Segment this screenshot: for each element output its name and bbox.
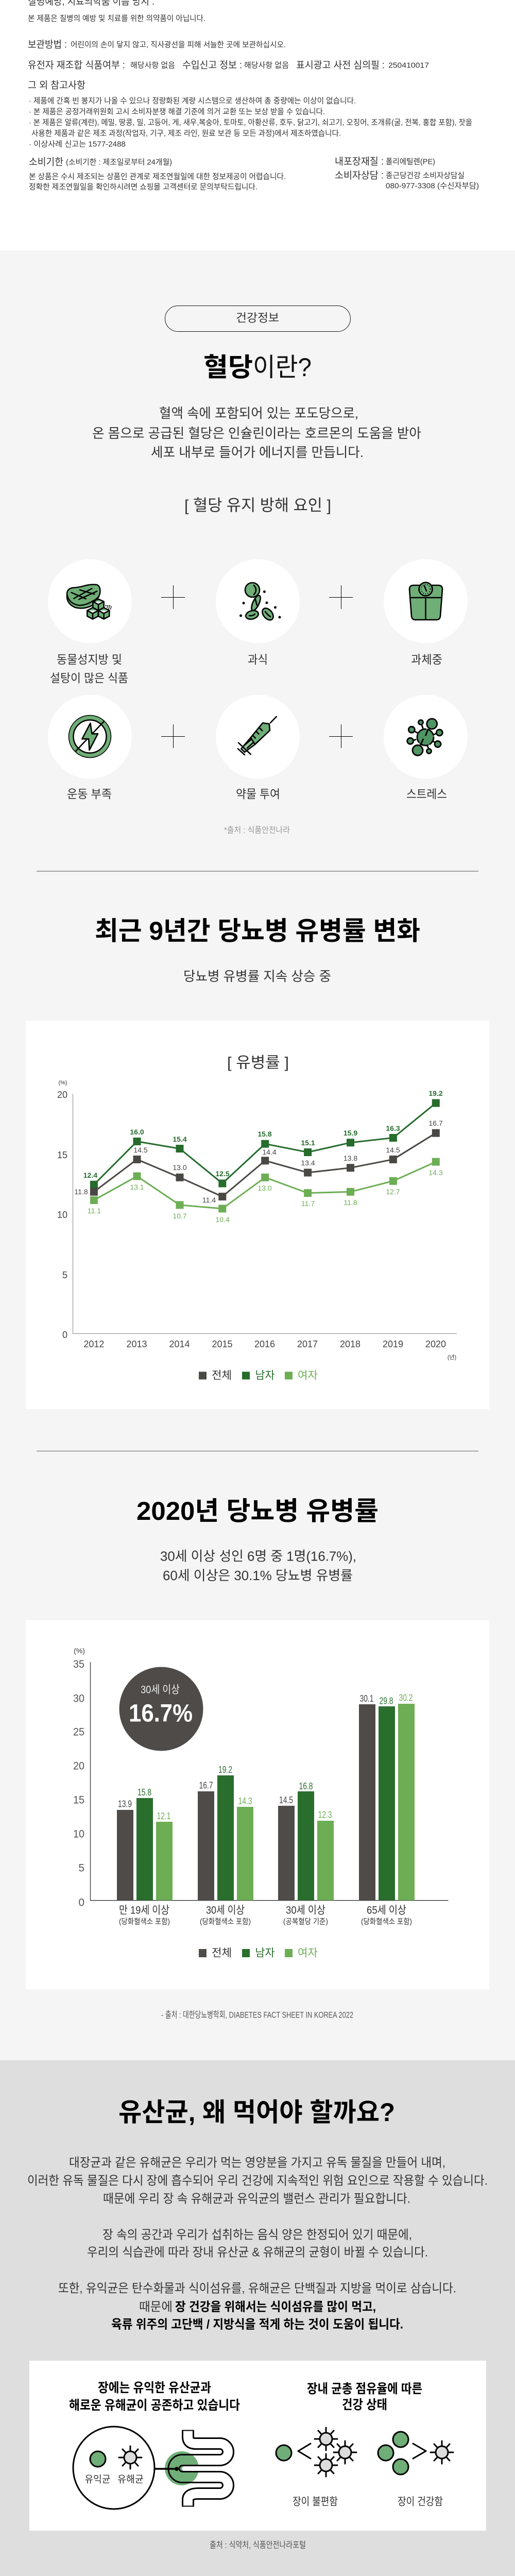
text: 2020 summary [160,1549,356,1583]
y axis: 20 [73,1760,84,1772]
y axis: 25 [73,1726,84,1738]
value labels: total: 14.5 [386,1146,400,1154]
icon: virus cell [407,719,442,755]
text: paragraph 1: 대장균과 같은 유해균은 우리가 먹는 영양분을 가지고 유독 물질을 만들어 내며, [69,2156,445,2170]
text: regulatory info row: 수입신고 정보 : [182,60,242,71]
plus sign 1 [161,585,185,609]
bars: age 30 plus HbA1c: 19.2 [218,1765,232,1775]
panel: what is blood sugar [48,306,468,835]
y axis: 15 [73,1794,84,1806]
bars: age 19 plus [117,1787,173,1900]
x axis labels: 2012 [83,1339,104,1349]
text: blood sugar description: 혈액 속에 포함되어 있는 포도당으로, [159,405,358,421]
panel: product notice [28,0,479,192]
value labels: female: 13.1 [130,1183,144,1191]
x axis labels [83,1339,456,1361]
text: expiry: (소비기한 : 제조일로부터 24개월) [66,158,172,167]
legend: 남자 [255,1369,275,1382]
panel: why probiotics [27,2098,488,2550]
x axis labels: 2015 [212,1339,233,1349]
legend [199,1947,318,1959]
label: uncomfortable: 장이 불편함 [293,2496,338,2508]
text: packaging and consumer service: 폴리에틸렌(PE) [386,158,435,166]
heading: 2020 prevalence: 2020년 당뇨병 유병률 [136,1497,379,1526]
x axis labels: 2018 [340,1339,360,1349]
legend: 여자 [298,1369,318,1382]
text: paragraph 1 [27,2156,488,2206]
label: 동물성지방 및 [57,653,122,666]
text: storage method: 보관방법 : [28,39,67,50]
category labels: (당화혈색소 포함) [361,1918,412,1926]
bars: age 19 plus: 13.9 [118,1799,132,1809]
source note: - 출처 : 대한당뇨병학회, DIABETES FACT SHEET IN KOREA 2022 [161,2010,353,2020]
value labels: female: 11.8 [344,1198,357,1207]
heading: health state: 장내 균총 점유율에 따른 [307,2382,422,2396]
text: paragraph 3: 장 건강을 위해서는 식이섬유를 많이 먹고, [175,2300,376,2314]
label: 과식 [248,653,268,666]
text: paragraph 3: 육류 위주의 고단백 / 지방식을 적게 하는 것이 도움이 됩니다. [111,2317,403,2332]
heading: coexist: 해로운 유해균이 공존하고 있습니다 [69,2398,240,2413]
heading: why probiotics: 유산균, 왜 먹어야 할까요? [118,2098,395,2127]
chart card: line chart [26,1021,489,1409]
text: 2020 summary: 30세 이상 성인 6명 중 1명(16.7%), [160,1549,356,1564]
value labels: male: 19.2 [428,1089,443,1097]
x axis labels: 2014 [169,1339,190,1349]
value labels: female: 12.7 [386,1188,400,1196]
value labels: total: 14.4 [262,1148,277,1156]
y axis and labels: 20 [57,1090,67,1100]
illustration: unhealthy gut balance [276,2428,356,2508]
value labels: male: 12.5 [215,1170,230,1178]
x axis labels: (년) [448,1354,456,1361]
y axis and labels: 10 [57,1210,67,1220]
text: paragraph 2 [87,2228,428,2260]
legend [199,1369,318,1382]
y axis and labels: 5 [62,1270,67,1280]
y axis and labels: (%) [58,1080,67,1086]
factor: overweight [384,560,468,666]
factor: overeating [216,560,300,666]
label: 약물 투여 [236,787,280,801]
y axis and labels: 0 [62,1330,67,1340]
factor: lack of exercise [48,694,132,801]
value labels: male: 15.4 [173,1135,187,1143]
icon: harmful bacterium [119,2446,142,2469]
text: expiry: 소비기한 [29,157,63,168]
heading: what is blood sugar [203,353,312,382]
heading: coexist [69,2381,240,2413]
callout: 16.7 percent [119,1667,203,1751]
value labels: male: 16.3 [386,1124,400,1132]
legend: 전체 [212,1947,232,1959]
value labels: female [88,1168,443,1224]
label: 스트레스 [406,787,447,801]
bars: age 30 plus fasting [278,1781,334,1900]
text: regulatory info row: 해당사항 없음 [244,61,289,70]
text: storage method: 어린이의 손이 닿지 않고, 직사광선을 피해 서늘한 곳에 보관하십시오. [71,40,286,49]
value labels: total: 13.4 [301,1159,315,1167]
plus sign 2 [329,585,353,609]
text: blood sugar description [92,405,421,460]
bars: age 30 plus HbA1c: 16.7 [199,1781,213,1791]
label: good bacteria: 유익균 [84,2474,110,2485]
chart title: [ 유병률 ] [227,1054,289,1072]
text: blood sugar description: 온 몸으로 공급된 혈당은 인슐린이라는 호르몬의 도움을 받아 [92,426,421,441]
subheading: trend: 당뇨병 유병률 지속 상승 중 [183,969,331,984]
text: 2020 summary: 60세 이상은 30.1% 당뇨병 유병률 [163,1568,353,1583]
text: expiry: 정확한 제조연월일을 확인하시려면 쇼핑몰 고객센터로 문의부탁드립니다. [29,182,258,192]
series: male [90,1099,440,1189]
text: expiry [29,157,286,192]
value labels: female: 13.0 [258,1184,272,1192]
icon: weight scale [409,582,442,620]
illustration: magnified gut bacteria [73,2427,154,2509]
x axis labels: 2017 [297,1339,318,1349]
text: blood sugar description: 세포 내부로 들어가 에너지를 만듭니다. [151,445,364,460]
series: total [90,1129,440,1200]
text: notes list: · 본 제품은 알류(계란), 메밀, 땅콩, 밀, 고등어, 게, 새우,복숭아, 토마토, 아황산류, 호두, 닭고기, 쇠고기, 오징어, 조개류(굴, 전복, 홍합 포함), 잣을 [29,117,472,127]
tag: health info pill: 건강정보 [236,311,279,325]
callout: 16.7 percent: 30세 이상 [141,1684,180,1696]
bars: age 65 plus: 30.1 [359,1693,374,1704]
legend: 여자 [298,1947,318,1959]
text: paragraph 1: 이러한 유독 물질은 다시 장에 흡수되어 우리 건강에 지속적인 위험 요인으로 작용할 수 있습니다. [27,2174,488,2188]
source note: *출처 : 식품안전나라 [224,825,290,835]
value labels: total: 13.0 [173,1163,187,1172]
text: storage method [28,39,286,50]
icon: no energy [69,715,111,757]
value labels: total: 13.8 [344,1154,357,1162]
factor: stress [384,694,468,801]
value labels: female: 10.7 [173,1212,187,1220]
label: 운동 부족 [67,787,112,801]
icon: cells [239,583,281,622]
y axis [73,1647,448,1908]
y axis: 10 [73,1828,84,1840]
heading: coexist: 장에는 유익한 유산균과 [98,2381,211,2395]
category labels: 만 19세 이상 [119,1904,169,1917]
x axis labels: 2020 [425,1339,446,1349]
heading: trend: 최근 9년간 당뇨병 유병률 변화 [95,917,420,945]
text: notes list: · 본 제품은 공정거래위원회 고시 소비자분쟁 해결 기준에 의거 교환 또는 보상 받을 수 있습니다. [29,107,325,116]
heading: other notes: 그 외 참고사항 [28,79,85,91]
heading: what is blood sugar: 혈당 [203,353,253,382]
legend: 전체 [212,1369,232,1382]
text: paragraph 1: 때문에 우리 장 속 유해균과 유익균의 밸런스 관리가 필요합니다. [103,2192,410,2206]
text: paragraph 2: 우리의 식습관에 따라 장내 유산균 & 유해균의 균형이 바뀔 수 있습니다. [87,2245,428,2260]
value labels: male: 15.9 [344,1129,357,1137]
card: gut flora diagram [29,2361,486,2531]
text: notes list: · 제품에 간혹 빈 봉지가 나올 수 있으나 정량화된 계량 시스템으로 생산하여 총 중량에는 이상이 없습니다. [29,96,356,105]
panel: 9-year trend [26,917,489,1409]
x axis labels: 2019 [383,1339,403,1349]
text: paragraph 2: 장 속의 공간과 우리가 섭취하는 음식 양은 한정되어 있기 때문에, [102,2228,412,2242]
text: regulatory info row: 해당사항 없음 [130,61,175,70]
text: notes list: 사용한 제품과 같은 제조 과정(작업자, 기구, 제조 라인, 원료 보관 등 모든 과정)에서 제조하였습니다. [31,129,341,138]
category labels [119,1904,412,1926]
illustration: healthy gut balance [378,2432,453,2508]
icon: syringe [238,717,277,755]
y axis: 0 [78,1897,84,1908]
value labels: male: 15.1 [301,1139,315,1147]
bars: age 65 plus [359,1693,415,1900]
y axis: 35 [73,1658,84,1670]
y axis: 30 [73,1693,84,1704]
heading: health state: 건강 상태 [342,2398,387,2412]
text: packaging and consumer service: 종근당건강 소비자상담실 [386,171,465,180]
heading: what is blood sugar: 이란? [253,353,312,382]
source note: 출처 : 식약처, 식품안전나라포털 [210,2540,306,2550]
icon: meat and sugar cubes [67,585,112,619]
bars: age 30 plus fasting: 12.3 [318,1810,332,1820]
category labels: (공복혈당 기준) [283,1918,328,1926]
y axis and labels [57,1080,457,1340]
factor: medication [216,694,300,801]
label [50,653,128,685]
text: regulatory info row: 250410017 [388,61,429,70]
category labels: (당화혈색소 포함) [119,1918,170,1926]
category labels: 30세 이상 [286,1904,325,1917]
heading: factors: [ 혈당 유지 방해 요인 ] [184,497,331,514]
value labels: total: 14.5 [133,1146,148,1154]
text: notes list [29,96,472,148]
value labels: male: 12.4 [83,1171,97,1179]
bars: age 30 plus fasting: 16.8 [299,1781,313,1791]
tag: health info pill [165,306,350,332]
y axis and labels: 15 [57,1150,67,1160]
value labels: male: 15.8 [258,1130,272,1138]
label: 설탕이 많은 식품 [50,671,128,685]
text: packaging and consumer service: 내포장재질 : [335,156,384,167]
value labels: total: 11.8 [74,1188,88,1196]
bars: age 65 plus: 30.2 [399,1693,413,1703]
value labels: female: 14.3 [428,1168,443,1177]
heading: health state [307,2382,422,2412]
factor: animal fat and sugar [48,560,132,685]
value labels: total: 16.7 [428,1119,443,1127]
text: paragraph 3 [58,2281,456,2332]
text: packaging and consumer service: 소비자상담 : [335,170,384,181]
label: 과체중 [411,653,442,666]
value labels: male: 16.0 [130,1128,144,1136]
text: regulatory info row: 유전자 재조합 식품여부 : [28,60,125,71]
category labels: 30세 이상 [206,1904,245,1917]
y axis: (%) [74,1647,85,1655]
category labels: (당화혈색소 포함) [200,1918,251,1926]
callout: 16.7 percent: 16.7% [129,1700,193,1727]
label: healthy: 장이 건강함 [398,2496,443,2508]
text: expiry: 본 상품은 수시 제조되는 상품인 관계로 제조연월일에 대한 정보제공이 어렵습니다. [29,172,286,181]
illustration: intestine [154,2430,228,2507]
text: paragraph 3: 때문에 [139,2300,173,2314]
text: regulatory info row: 표시광고 사전 심의필 : [296,60,385,71]
bars: age 19 plus: 15.8 [138,1787,151,1798]
bars: age 30 plus fasting: 14.5 [279,1795,293,1805]
chart card: bar chart [26,1620,489,1989]
value labels: total: 11.4 [202,1196,216,1204]
text: regulatory info row [28,60,429,71]
category labels: 65세 이상 [367,1904,406,1917]
legend: 남자 [255,1947,275,1959]
value labels: total [74,1119,443,1204]
y axis: 5 [78,1862,84,1874]
value labels: female: 11.7 [301,1199,315,1208]
text: not a medicine: 본 제품은 질병의 예방 및 치료를 위한 의약품이 아닙니다. [28,14,205,23]
plus sign 4 [329,724,353,748]
bars: age 65 plus: 29.8 [379,1696,393,1706]
text: paragraph 3: 또한, 유익균은 탄수화물과 식이섬유를, 유해균은 단백질과 지방을 먹이로 삼습니다. [58,2281,456,2296]
value labels: male [83,1089,443,1179]
x axis labels: 2013 [126,1339,147,1349]
text: notes list: · 이상사례 신고는 1577-2488 [29,140,126,148]
value labels: female: 10.4 [215,1215,230,1224]
text: packaging and consumer service: 080-977-3308 (수신자부담) [386,181,479,191]
panel: 2020 prevalence [26,1497,489,2020]
x axis labels: 2016 [254,1339,275,1349]
bars: age 19 plus: 12.1 [157,1811,171,1821]
plus sign 3 [161,724,185,748]
bars: age 30 plus HbA1c: 14.3 [238,1796,252,1806]
text: packaging and consumer service [335,156,479,191]
series: female [90,1158,440,1212]
bars: age 30 plus HbA1c [198,1765,253,1900]
value labels: female: 11.1 [88,1207,101,1215]
label: bad bacteria: 유해균 [117,2474,144,2485]
